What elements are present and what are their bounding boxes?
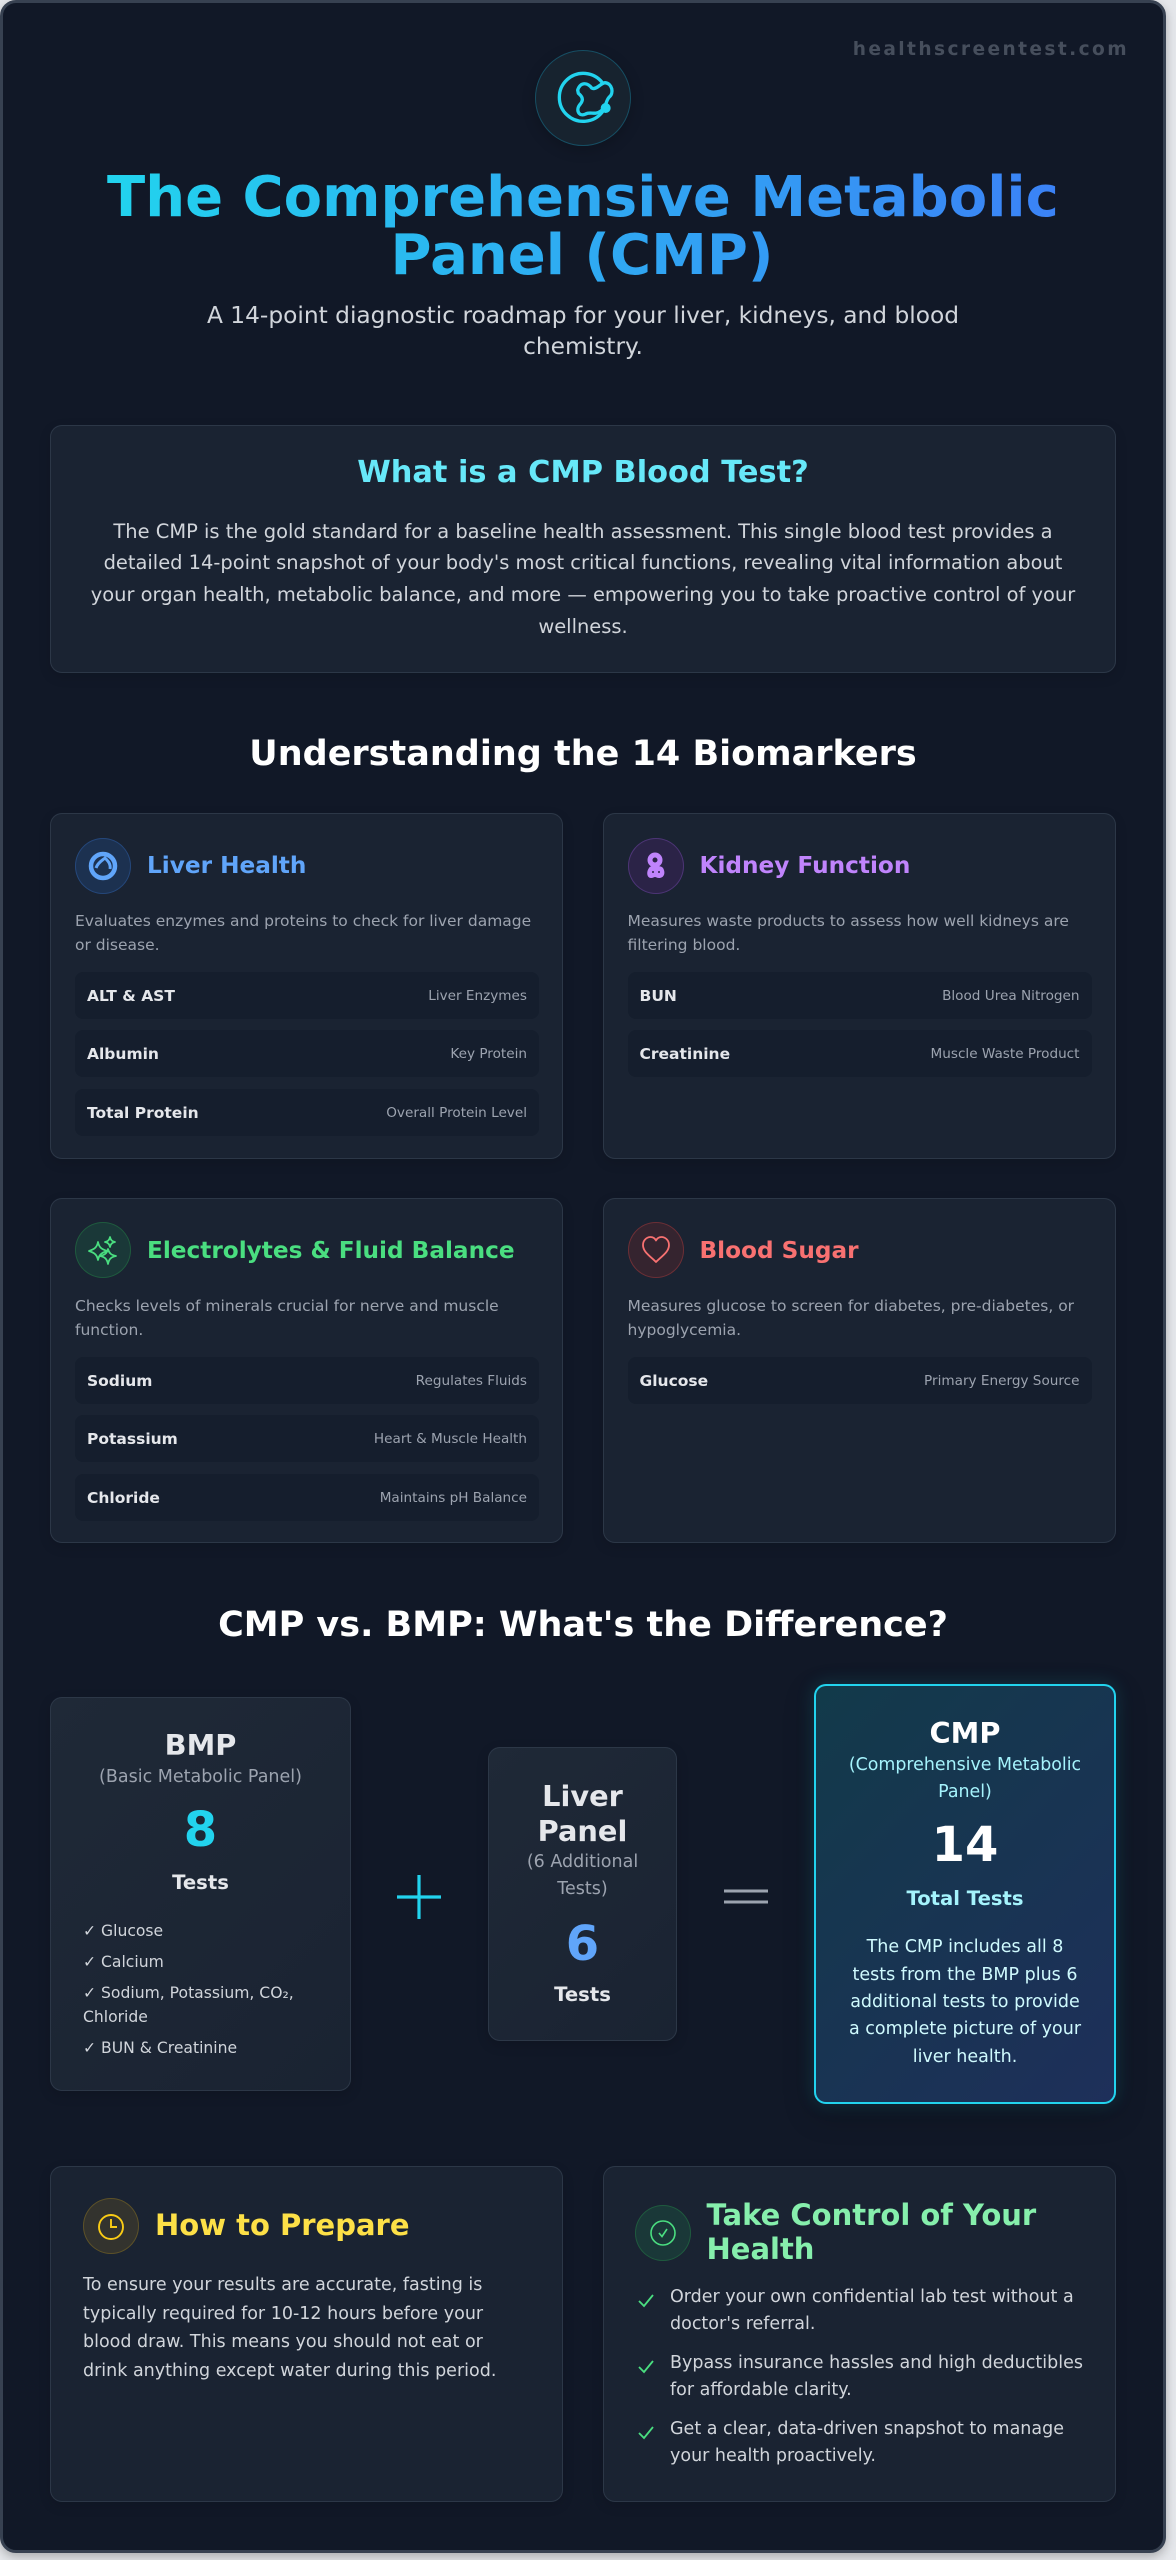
text: fasting advice: [82, 2275, 496, 2380]
subtitle: [207, 302, 959, 360]
benefit 1: [638, 2286, 1074, 2334]
text: CMP subtitle: [849, 1754, 1081, 1802]
row: total protein: [75, 1089, 539, 1136]
panel: take control: [602, 2166, 1116, 2502]
watermark: healthscreentest.com: [853, 39, 1129, 60]
row: albumin: Key Protein: [450, 1046, 527, 1062]
row: potassium: Heart & Muscle Health: [374, 1430, 527, 1446]
subtitle: A 14-point diagnostic roadmap for your liver, kidneys, and blood: [207, 302, 959, 329]
panel: liver health: [50, 813, 563, 1159]
heading: CMP: CMP: [930, 1716, 1000, 1750]
text: CMP description: detailed 14-point snapshot of your body's most critical functions, revealing vital information about: [104, 551, 1062, 574]
row: sodium: Regulates Fluids: [416, 1372, 527, 1388]
title: [107, 169, 1057, 286]
panel: kidney function: [602, 813, 1116, 1159]
text: CMP explanation: additional tests to provide: [850, 1992, 1080, 2012]
heading: CMP vs BMP: CMP vs. BMP: What's the Difference?: [218, 1605, 948, 1645]
title: Panel (CMP): [391, 223, 773, 288]
row: glucose: Glucose: [640, 1372, 708, 1390]
list: BMP tests: ✓ Sodium, Potassium, CO₂,: [83, 1984, 294, 2002]
benefit 3: [638, 2418, 1064, 2466]
row: sodium: Sodium: [87, 1372, 152, 1390]
text: CMP description: The CMP is the gold standard for a baseline health assessment. This single blood test provides a: [113, 520, 1053, 542]
heading: kidney function: Kidney Function: [700, 852, 910, 879]
text: CMP explanation: a complete picture of your: [849, 2019, 1081, 2039]
panel: BMP: [50, 1697, 351, 2091]
subtitle: chemistry.: [523, 333, 643, 360]
text: CMP description: your organ health, metabolic balance, and more — empowering you to take proactive control of your: [91, 583, 1075, 606]
heading: how to prepare: How to Prepare: [155, 2208, 410, 2242]
heading: liver panel: Panel: [538, 1814, 627, 1848]
row: creatinine: [628, 1030, 1092, 1077]
text: liver description: or disease.: [75, 936, 160, 954]
icon: equals: [724, 1890, 768, 1904]
list: BMP tests: ✓ Glucose: [83, 1922, 163, 1940]
row: ALT & AST: ALT & AST: [87, 986, 175, 1004]
row: albumin: Albumin: [87, 1044, 159, 1062]
list: benefits: [638, 2286, 1083, 2466]
number: 8: 8: [184, 1802, 217, 1858]
text: electrolytes description: [75, 1297, 499, 1338]
row: chloride: Chloride: [87, 1488, 160, 1506]
text: blood sugar description: Measures glucose to screen for diabetes, pre-diabetes, or: [628, 1297, 1074, 1315]
list: BMP tests: ✓ Calcium: [83, 1953, 164, 1971]
text: CMP description: wellness.: [538, 615, 628, 638]
heading: biomarkers: Understanding the 14 Biomarkers: [249, 734, 917, 774]
benefit 2: [638, 2352, 1083, 2400]
benefit 2: Bypass insurance hassles and high deductibles: [670, 2352, 1083, 2372]
row: potassium: [75, 1415, 539, 1462]
label: total tests: Total Tests: [906, 1886, 1024, 1910]
text: CMP explanation: liver health.: [913, 2047, 1017, 2067]
number: 14: 14: [932, 1817, 998, 1873]
row: ALT & AST: [75, 972, 539, 1019]
label: tests: Tests: [172, 1871, 229, 1894]
text: kidney description: Measures waste products to assess how well kidneys are: [628, 912, 1069, 930]
text: CMP explanation: [849, 1937, 1082, 2067]
text: CMP explanation: The CMP includes all 8: [867, 1937, 1063, 1957]
panel: what is a CMP blood test: [50, 425, 1116, 673]
text: fasting advice: To ensure your results are accurate, fasting is: [83, 2275, 482, 2295]
row: chloride: Maintains pH Balance: [380, 1490, 527, 1506]
icon: plus: [397, 1875, 441, 1919]
text: liver panel subtitle: Tests): [557, 1878, 608, 1898]
heading: liver panel: [538, 1779, 627, 1848]
text: fasting advice: drink anything except water during this period.: [83, 2360, 496, 2380]
text: fasting advice: typically required for 10-12 hours before your: [83, 2304, 483, 2324]
text: electrolytes description: function.: [75, 1320, 143, 1338]
row: chloride: [75, 1474, 539, 1521]
row: BUN: Blood Urea Nitrogen: [942, 988, 1080, 1004]
heading: take control: [706, 2198, 1036, 2266]
heading: take control: Health: [706, 2232, 814, 2266]
panel: blood sugar: [602, 1198, 1116, 1543]
text: CMP subtitle: (Comprehensive Metabolic: [849, 1754, 1081, 1774]
panel: electrolytes: [50, 1198, 563, 1543]
heading: what is a CMP: What is a CMP Blood Test?: [357, 455, 809, 490]
row: glucose: [628, 1357, 1092, 1404]
row: creatinine: Creatinine: [640, 1044, 730, 1062]
label: tests: Tests: [554, 1983, 611, 2006]
heading: take control: Take Control of Your: [706, 2198, 1036, 2232]
panel: liver panel: [488, 1747, 677, 2041]
row: BUN: [628, 972, 1092, 1019]
panel: CMP: [814, 1684, 1116, 2104]
text: CMP explanation: tests from the BMP plus 6: [853, 1965, 1077, 1985]
text: CMP subtitle: Panel): [938, 1782, 992, 1802]
list: BMP tests: Chloride: [83, 2008, 148, 2026]
text: liver panel subtitle: [527, 1852, 638, 1898]
list: BMP tests: ✓ BUN & Creatinine: [83, 2039, 237, 2057]
heading: BMP: BMP: [165, 1728, 236, 1762]
list: BMP tests: [83, 1922, 294, 2057]
text: electrolytes description: Checks levels of minerals crucial for nerve and muscle: [75, 1297, 499, 1315]
row: total protein: Overall Protein Level: [386, 1104, 527, 1120]
text: fasting advice: blood draw. This means you should not eat or: [83, 2332, 483, 2352]
text: CMP description: [91, 520, 1076, 638]
heading: liver panel: Liver: [542, 1779, 623, 1813]
text: liver description: Evaluates enzymes and proteins to check for liver damage: [75, 912, 531, 930]
benefit 3: Get a clear, data-driven snapshot to manage: [670, 2418, 1064, 2438]
row: ALT & AST: Liver Enzymes: [428, 988, 527, 1004]
row: glucose: Primary Energy Source: [924, 1372, 1080, 1388]
icon: heart: [628, 1222, 684, 1278]
benefit 1: doctor's referral.: [670, 2314, 815, 2334]
text: kidney description: [628, 912, 1069, 954]
icon: kidney: [628, 838, 684, 894]
title: The Comprehensive Metabolic: [107, 165, 1059, 230]
text: blood sugar description: [628, 1297, 1074, 1338]
text: kidney description: filtering blood.: [628, 936, 740, 954]
row: BUN: BUN: [640, 986, 677, 1004]
benefit 3: your health proactively.: [670, 2446, 876, 2466]
row: total protein: Total Protein: [87, 1104, 199, 1122]
row: albumin: [75, 1030, 539, 1077]
text: BMP subtitle: (Basic Metabolic Panel): [99, 1767, 302, 1787]
heading: liver health: Liver Health: [147, 852, 306, 879]
row: creatinine: Muscle Waste Product: [931, 1046, 1080, 1062]
row: sodium: [75, 1357, 539, 1404]
icon: sparkles: [75, 1222, 131, 1278]
heading: blood sugar: Blood Sugar: [700, 1237, 859, 1264]
heading: electrolytes: Electrolytes & Fluid Balance: [147, 1237, 515, 1264]
text: liver description: [75, 912, 531, 954]
text: blood sugar description: hypoglycemia.: [628, 1320, 741, 1338]
row: potassium: Potassium: [87, 1430, 178, 1448]
icon: check circle: [634, 2205, 690, 2261]
benefit 2: for affordable clarity.: [670, 2380, 852, 2400]
benefit 1: Order your own confidential lab test without a: [670, 2286, 1074, 2306]
number: 6: 6: [566, 1916, 599, 1972]
icon: clock: [83, 2198, 139, 2254]
icon: hero organ: [535, 50, 631, 146]
text: liver panel subtitle: (6 Additional: [527, 1852, 638, 1872]
icon: liver: [75, 838, 131, 894]
panel: how to prepare: [50, 2166, 563, 2502]
